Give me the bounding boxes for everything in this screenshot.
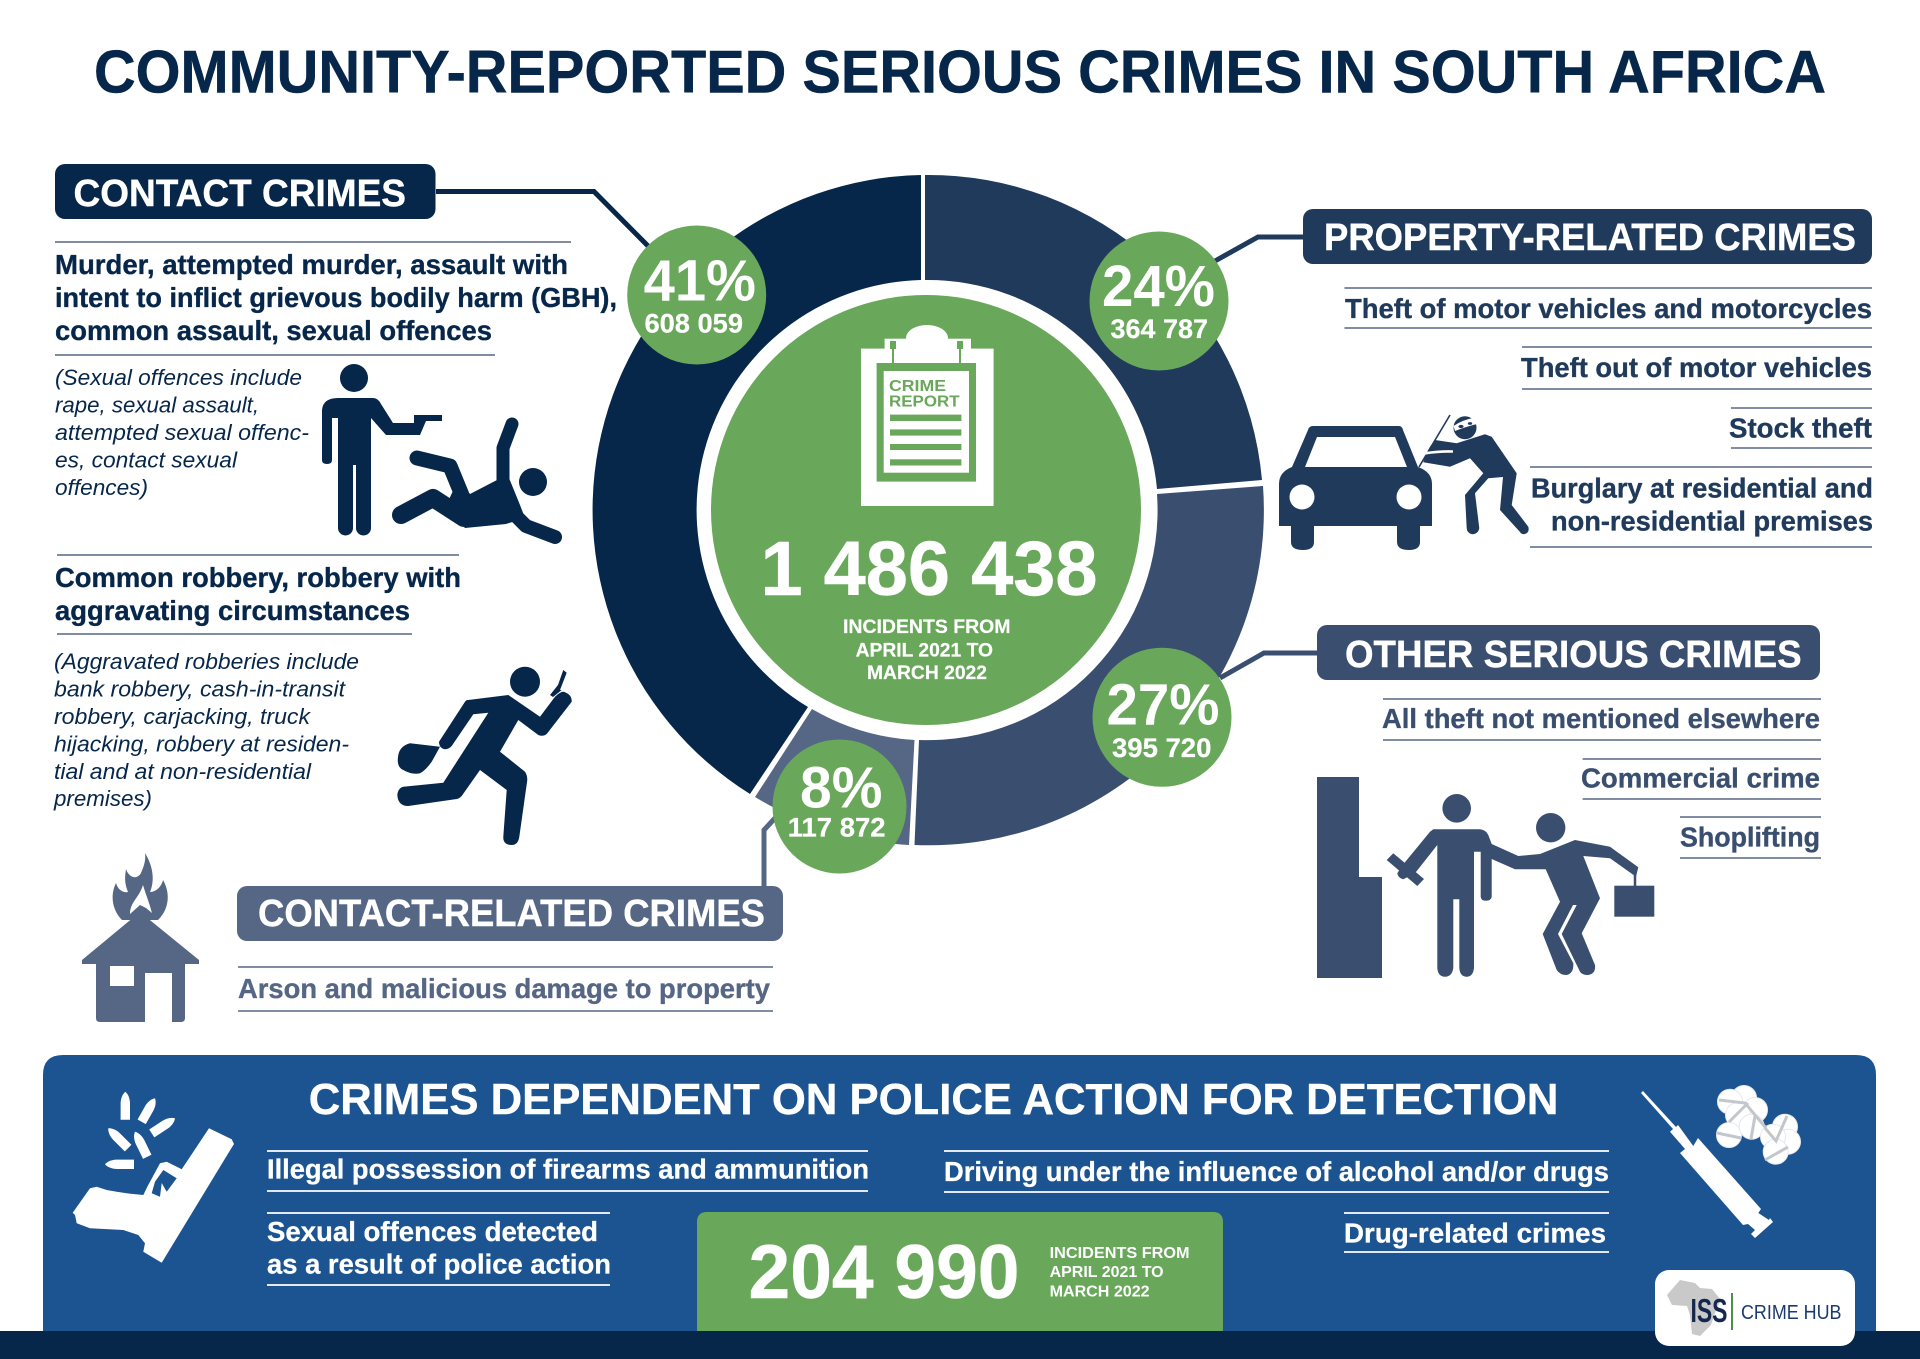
text: murder and assault categories: intent to inflict grievous bodily harm (GBH), [55,282,617,313]
icon: handgun and bullets [73,1092,234,1263]
panel: crimes dependent on police action [43,1055,1876,1331]
note: sexual offences: rape, sexual assault, [55,393,259,418]
text: sexual offences detected: Sexual offences detected [267,1216,598,1247]
connector: property-related crimes [1215,237,1303,261]
note: sexual offences: attempted sexual offenc- [55,420,309,445]
heading: contact crimes: CONTACT CRIMES [74,173,406,215]
icon: gunman and falling victim [322,364,555,537]
note: sexual offences: (Sexual offences include [55,365,302,390]
text: murder and assault categories: Murder, attempted murder, assault with [55,249,568,280]
text: robbery categories: aggravating circumstances [55,595,410,626]
text: drug-related crimes: Drug-related crimes [1344,1218,1606,1248]
callout: police-detected total: 204 990 [748,1230,1020,1315]
panel: property-related crimes [1279,209,1873,550]
heading: property-related crimes: PROPERTY-RELATED CRIMES [1324,217,1856,259]
text: burglary: Burglary at residential and [1531,472,1873,504]
icon: house on fire [82,853,199,1022]
icon: crime report clipboard: CRIME [889,378,946,395]
text: murder and assault categories: common assault, sexual offences [55,315,492,346]
text: burglary: non-residential premises [1551,506,1873,536]
badge: 8% [772,740,906,874]
badge: 41%: 608 059 [644,308,743,338]
icon: crime report clipboard [861,325,994,506]
text: stock theft: Stock theft [1729,413,1872,444]
panel: contact crimes [53,164,783,1022]
segment: property-related crimes 24% [925,175,1262,489]
incidents period: INCIDENTS FROM [843,616,1010,638]
note: aggravated robberies: premises) [53,786,152,811]
callout: police-detected total [697,1212,1223,1331]
note: sexual offences: offences) [55,475,148,500]
text: robbery categories: Common robbery, robbery with [55,562,461,593]
note: sexual offences: es, contact sexual [55,448,238,472]
donut chart [593,175,1264,845]
text: illegal possession of firearms: Illegal possession of firearms and ammunition [267,1154,869,1184]
note: sexual offences [55,365,309,500]
total incidents figure: 1 486 438 [760,526,1098,612]
badge: 27%: 395 720 [1112,733,1211,763]
text: burglary [1531,472,1873,536]
note: aggravated robberies: bank robbery, cash-in-transit [54,677,347,702]
heading: other serious crimes: OTHER SERIOUS CRIMES [1345,634,1802,676]
incidents period: MARCH 2022 [867,662,987,684]
callout: police-detected total: INCIDENTS FROM [1050,1245,1190,1262]
note: aggravated robberies: hijacking, robbery at residen- [54,732,349,757]
badge: 8%: 8% [800,756,882,820]
icon: crime report clipboard: REPORT [889,394,960,411]
icon: syringe and pills [1641,1086,1800,1238]
incidents period [843,616,1010,684]
note: aggravated robberies: robbery, carjacking, truck [54,704,312,729]
text: sexual offences detected [267,1216,611,1280]
icon: shoplifters at counter [1317,777,1654,978]
note: aggravated robberies: (Aggravated robberies include [54,649,359,674]
badge: 24%: 24% [1102,254,1215,319]
segment: contact-related crimes 8% [755,709,914,845]
heading: contact-related crimes: CONTACT-RELATED CRIMES [258,893,765,935]
text: arson and malicious damage: Arson and malicious damage to property [238,973,770,1004]
callout: police-detected total: APRIL 2021 TO [1050,1264,1164,1281]
connector: other serious crimes [1220,653,1317,678]
icon: burglar breaking into car [1279,415,1529,550]
segment: contact crimes 41% [593,175,921,794]
text: commercial crime: Commercial crime [1581,763,1820,794]
badge: 41%: 41% [644,248,756,313]
segment: other serious crimes 27% [914,486,1264,845]
callout: police-detected total: MARCH 2022 [1050,1284,1150,1301]
connector: contact-related crimes [764,817,776,888]
incidents period: APRIL 2021 TO [856,640,993,662]
text: driving under the influence: Driving under the influence of alcohol and/or drugs [944,1156,1609,1187]
footer bar [0,1331,1920,1359]
note: aggravated robberies [53,649,359,811]
heading: contact crimes [55,164,436,219]
icon: running robber with bag and gun [397,667,572,845]
heading: crimes dependent on police action for detection: CRIMES DEPENDENT ON POLICE ACTION FOR DETECTION [309,1075,1558,1124]
badge: 24% [1090,232,1228,370]
logo: ISS Crime Hub: ISS [1690,1292,1728,1329]
note: aggravated robberies: tial and at non-residential [54,759,312,784]
badge: 27% [1092,648,1232,787]
text: robbery categories [55,562,461,626]
text: shoplifting: Shoplifting [1680,822,1820,852]
badge: 41% [627,226,766,364]
badge: 24%: 364 787 [1110,314,1208,344]
connector: contact crimes [436,192,650,248]
text: theft out of motor vehicles: Theft out of motor vehicles [1521,352,1872,383]
logo: ISS Crime Hub: CRIME HUB [1741,1302,1842,1324]
text: sexual offences detected: as a result of police action [267,1249,611,1280]
badge: 27%: 27% [1106,672,1220,738]
text: theft of motor vehicles: Theft of motor vehicles and motorcycles [1345,293,1872,324]
text: all theft: All theft not mentioned elsewhere [1382,703,1820,734]
centre total circle [711,295,1141,725]
logo: ISS Crime Hub [1655,1270,1855,1346]
badge: 8%: 117 872 [788,813,886,843]
text: murder and assault categories [55,249,617,346]
panel: other serious crimes [1317,625,1821,978]
title: COMMUNITY-REPORTED SERIOUS CRIMES IN SOUTH AFRICA [94,38,1826,106]
